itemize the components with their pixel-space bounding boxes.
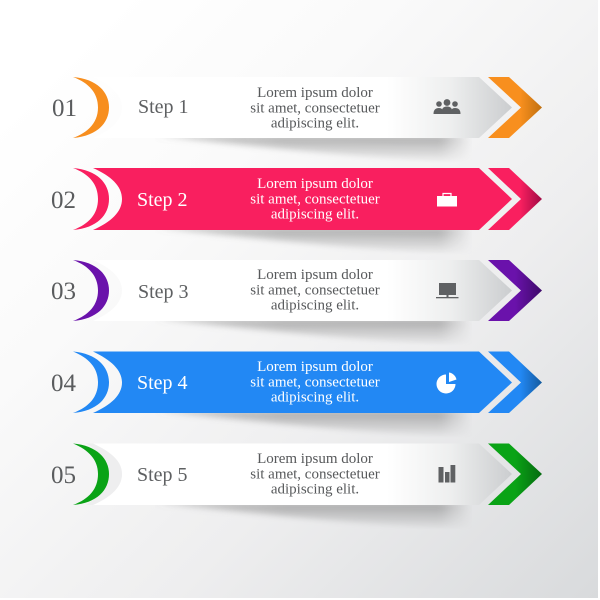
chevron 01 bbox=[488, 77, 542, 138]
number 01: 01 bbox=[52, 95, 77, 122]
description 05: Lorem ipsum dolor bbox=[257, 451, 373, 467]
step 3 label: Step 3 bbox=[138, 281, 189, 303]
band 05 bbox=[93, 444, 512, 505]
description 04: Lorem ipsum dolor bbox=[257, 359, 373, 375]
band 04 bbox=[93, 352, 512, 413]
crescent 02 bbox=[73, 168, 109, 230]
icon: pie chart bbox=[436, 372, 456, 394]
description 04: adipiscing elit. bbox=[271, 390, 359, 406]
step 5 label: Step 5 bbox=[137, 464, 188, 486]
crescent 05 bbox=[73, 444, 109, 505]
description 04: sit amet, consectetuer bbox=[250, 374, 380, 390]
description 01: adipiscing elit. bbox=[271, 116, 359, 132]
description 05: sit amet, consectetuer bbox=[250, 466, 380, 482]
chevron 04 bbox=[488, 352, 542, 413]
crescent 04 bbox=[73, 352, 109, 413]
band 05 inner curve bbox=[86, 444, 122, 505]
number 03: 03 bbox=[51, 278, 76, 305]
step 2 label: Step 2 bbox=[137, 189, 188, 211]
row 02 bbox=[51, 168, 542, 258]
shadow 01 bbox=[170, 138, 468, 160]
description 01: Lorem ipsum dolor bbox=[257, 85, 373, 101]
description 02: adipiscing elit. bbox=[271, 207, 359, 223]
description 03: adipiscing elit. bbox=[271, 298, 359, 314]
number 05: 05 bbox=[51, 462, 76, 489]
step 1 label: Step 1 bbox=[138, 96, 189, 118]
chevron 02 bbox=[488, 168, 542, 230]
row 05 bbox=[51, 444, 542, 533]
description 03: sit amet, consectetuer bbox=[250, 282, 380, 298]
icon: briefcase bbox=[437, 194, 457, 206]
description 05: adipiscing elit. bbox=[271, 482, 359, 498]
shadow 03 bbox=[170, 321, 468, 343]
icon: bar chart bbox=[438, 465, 455, 482]
band 01 bbox=[93, 77, 512, 138]
step 4 label: Step 4 bbox=[137, 372, 188, 394]
crescent 01 bbox=[73, 77, 109, 138]
row 01 bbox=[52, 77, 542, 166]
description 03: Lorem ipsum dolor bbox=[257, 267, 373, 283]
description 02: sit amet, consectetuer bbox=[250, 191, 380, 207]
icon: people bbox=[434, 99, 460, 114]
chevron 03 bbox=[488, 260, 542, 321]
description 01: sit amet, consectetuer bbox=[250, 100, 380, 116]
shadow 04 bbox=[170, 413, 466, 434]
icon: monitor bbox=[436, 283, 458, 298]
description 02: Lorem ipsum dolor bbox=[257, 176, 373, 192]
shadow 02 bbox=[170, 230, 468, 252]
number 04: 04 bbox=[51, 370, 76, 397]
row 04 bbox=[51, 352, 542, 441]
band 02 bbox=[93, 168, 512, 230]
crescent 03 bbox=[73, 260, 109, 321]
number 02: 02 bbox=[51, 187, 76, 214]
chevron 05 bbox=[488, 444, 542, 505]
band 03 bbox=[93, 260, 512, 321]
shadow 05 bbox=[170, 505, 466, 526]
row 03 bbox=[51, 260, 542, 349]
